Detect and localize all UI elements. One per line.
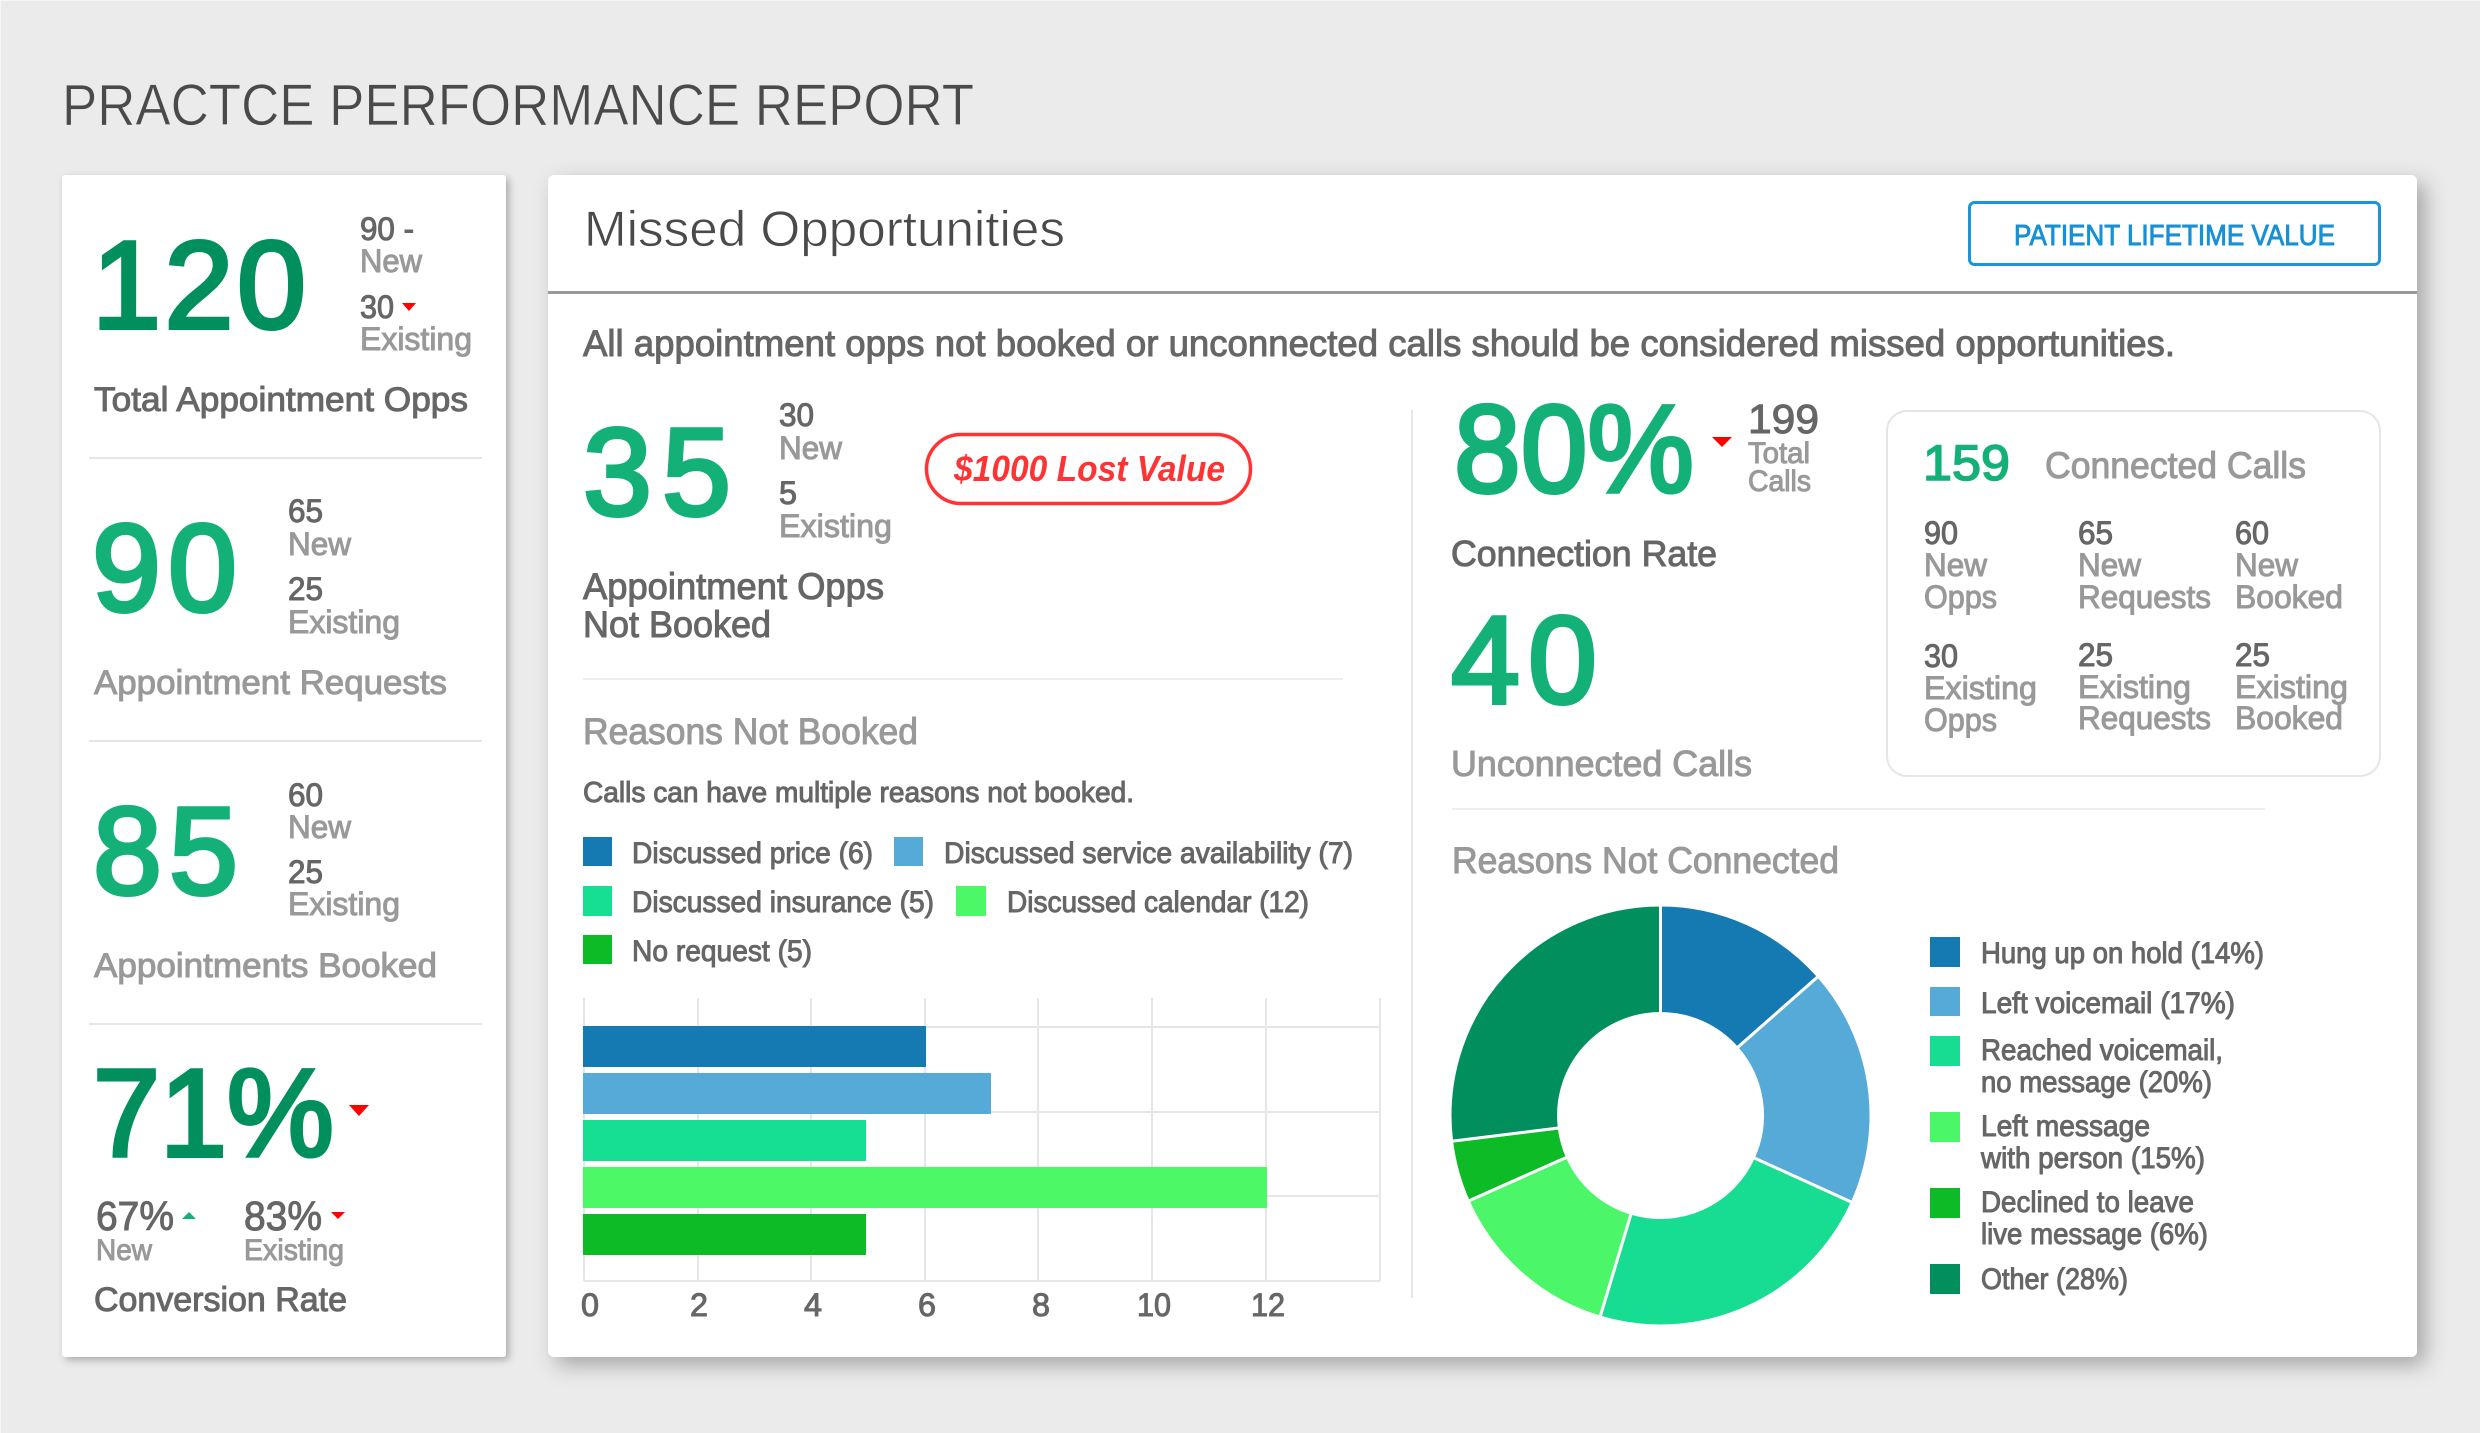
grid: new call breakdown: 90 — [1924, 515, 1958, 551]
donut chart: reasons not connected — [1450, 905, 1871, 1326]
bar chart: reasons not booked: 10 — [1137, 1287, 1171, 1323]
legend: reasons not connected: Reached voicemail, — [1981, 1034, 2223, 1067]
metric: appointment opps not booked: 5 — [779, 475, 797, 511]
callout: lost value: $1000 Lost Value — [953, 448, 1225, 489]
bar chart: reasons not booked: 4 — [804, 1287, 822, 1323]
metric: appointment opps not booked: 30 — [779, 397, 814, 433]
metric: total appointment opps: 120 — [92, 217, 306, 355]
grid: existing call breakdown: Existing — [2235, 669, 2348, 705]
legend: reasons not booked: Discussed service availability (7) — [944, 837, 1353, 870]
bar chart: reasons not booked: 0 — [581, 1287, 599, 1323]
legend: reasons not booked: Discussed insurance (5) — [632, 886, 934, 919]
metric: appointments booked: Appointments Booked — [94, 947, 437, 985]
panel: connected calls: Connected Calls — [2045, 445, 2306, 486]
grid: existing call breakdown: Existing — [2078, 669, 2191, 705]
heading: reasons not connected: Reasons Not Connected — [1452, 840, 1839, 881]
metric: appointments booked: 60 — [288, 777, 323, 813]
grid: new call breakdown: New — [2235, 547, 2299, 583]
metric: unconnected calls: 40 — [1451, 592, 1597, 730]
metric: appointments booked: New — [288, 809, 352, 845]
button: patient lifetime value: PATIENT LIFETIME VALUE — [2014, 220, 2335, 252]
button: patient lifetime value — [1970, 202, 2380, 264]
legend: reasons not connected: Other (28%) — [1981, 1263, 2128, 1296]
grid: new call breakdown: Opps — [1924, 579, 1997, 615]
metric: unconnected calls — [1451, 592, 1752, 784]
metric: connection rate: Connection Rate — [1451, 533, 1717, 574]
grid: existing call breakdown: Booked — [2235, 700, 2343, 736]
metric: total appointment opps: 30 — [360, 289, 394, 325]
grid: new call breakdown: Booked — [2235, 579, 2343, 615]
metric: appointments booked: Existing — [288, 886, 400, 922]
legend: reasons not connected: Declined to leave — [1981, 1186, 2194, 1219]
grid: existing call breakdown: 25 — [2235, 637, 2270, 673]
grid: new call breakdown — [1924, 515, 2343, 615]
bar chart: reasons not booked — [581, 998, 1380, 1323]
metric: appointment opps not booked: New — [779, 430, 843, 466]
grid: new call breakdown: New — [1924, 547, 1988, 583]
grid: new call breakdown: Requests — [2078, 579, 2211, 615]
grid: existing call breakdown: 25 — [2078, 637, 2113, 673]
legend: reasons not connected: with person (15%) — [1980, 1142, 2205, 1175]
grid: existing call breakdown: Requests — [2078, 700, 2211, 736]
bar chart: reasons not booked: 6 — [918, 1287, 936, 1323]
bar chart: reasons not booked: 8 — [1032, 1287, 1050, 1323]
legend: reasons not booked: No request (5) — [632, 935, 812, 968]
grid: new call breakdown: 65 — [2078, 515, 2113, 551]
heading: missed opportunities: Missed Opportunities — [584, 201, 1065, 257]
legend: reasons not connected: Left message — [1981, 1110, 2150, 1143]
metric: appointment opps not booked: Appointment Opps — [583, 566, 884, 607]
legend: reasons not connected: Hung up on hold (14%) — [1981, 937, 2264, 970]
metric: total appointment opps: New — [360, 243, 423, 279]
metric: connection rate — [1451, 381, 1819, 574]
panel: connected calls — [1887, 411, 2380, 776]
metric: appointment opps not booked: 35 — [583, 404, 731, 542]
legend: reasons not booked: Discussed calendar (12) — [1007, 886, 1309, 919]
panel: connected calls: 159 — [1923, 435, 2010, 491]
metric: connection rate: Total — [1748, 437, 1810, 470]
metric: connection rate: 199 — [1748, 396, 1819, 442]
legend: reasons not booked — [583, 837, 1353, 968]
legend: reasons not booked: Discussed price (6) — [632, 837, 873, 870]
metric: total appointment opps: Existing — [360, 321, 472, 357]
metric: appointment opps not booked — [583, 397, 892, 645]
panel: missed opportunities — [548, 175, 2417, 1357]
bar chart: reasons not booked: 2 — [690, 1287, 708, 1323]
legend: reasons not connected: live message (6%) — [1981, 1218, 2208, 1251]
grid: existing call breakdown: Opps — [1924, 702, 1997, 738]
grid: new call breakdown: 60 — [2235, 515, 2269, 551]
metric: appointment requests: 65 — [288, 493, 323, 529]
legend: reasons not connected: Left voicemail (17%) — [1981, 987, 2235, 1020]
bar chart: reasons not booked: 12 — [1251, 1287, 1285, 1323]
metric: appointment requests: Existing — [288, 604, 400, 640]
text: intro statement: All appointment opps not booked or unconnected calls should be considered missed opportunities. — [583, 323, 2175, 364]
metric: appointments booked — [93, 777, 437, 985]
legend: reasons not connected — [1930, 937, 2264, 1296]
metric: appointment requests — [92, 493, 447, 702]
metric: appointment requests: New — [288, 526, 352, 562]
legend: reasons not connected: no message (20%) — [1981, 1066, 2212, 1099]
grid: existing call breakdown — [1924, 637, 2348, 738]
metric: conversion rate: 67% — [96, 1193, 174, 1239]
metric: conversion rate: 71% — [93, 1045, 334, 1183]
metric: conversion rate: Conversion Rate — [94, 1281, 347, 1319]
metric: appointments booked: 25 — [288, 854, 323, 890]
metric: appointment requests: 90 — [92, 500, 237, 638]
metric: conversion rate: New — [96, 1234, 152, 1267]
grid: existing call breakdown: 30 — [1924, 638, 1958, 674]
panel: appointment summary — [62, 175, 506, 1357]
metric: unconnected calls: Unconnected Calls — [1451, 743, 1752, 784]
metric: conversion rate — [93, 1045, 369, 1319]
metric: appointments booked: 85 — [93, 783, 238, 921]
metric: total appointment opps: Total Appointment Opps — [94, 381, 468, 419]
metric: appointment opps not booked: Existing — [779, 508, 892, 544]
metric: appointment requests: Appointment Requests — [94, 664, 447, 702]
callout: lost value — [926, 434, 1250, 504]
metric: appointment opps not booked: Not Booked — [583, 604, 771, 645]
note: multiple reasons: Calls can have multiple reasons not booked. — [583, 777, 1134, 809]
grid: existing call breakdown: Existing — [1924, 670, 2037, 706]
title: PRACTCE PERFORMANCE REPORT — [62, 73, 974, 138]
metric: connection rate: Calls — [1748, 465, 1811, 498]
heading: reasons not booked: Reasons Not Booked — [583, 711, 918, 752]
metric: connection rate: 80% — [1454, 381, 1694, 519]
metric: conversion rate: 83% — [244, 1193, 322, 1239]
metric: total appointment opps: 90 - — [360, 211, 414, 247]
metric: total appointment opps — [92, 211, 472, 419]
metric: appointment requests: 25 — [288, 571, 323, 607]
grid: new call breakdown: New — [2078, 547, 2142, 583]
metric: conversion rate: Existing — [244, 1234, 344, 1267]
